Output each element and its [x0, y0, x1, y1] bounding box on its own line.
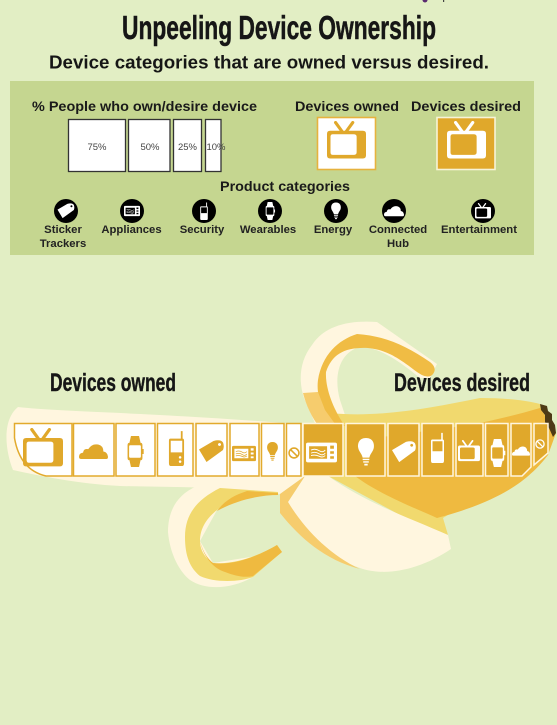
category: sticker trackers: Trackers: [40, 238, 86, 250]
size legend boxes: 10%: [206, 142, 226, 153]
peel: lower left cream: [168, 484, 282, 587]
tile: wearables owned: [116, 424, 155, 476]
strip: devices desired: [303, 424, 548, 476]
tile: security desired: [422, 424, 453, 476]
category: energy: Energy: [314, 224, 353, 236]
tile: energy owned: [262, 424, 284, 476]
tile: wearables desired: [486, 424, 508, 476]
heading: devices owned: Devices owned: [295, 98, 399, 114]
cream flesh bottom: [288, 476, 451, 572]
tile: none owned: [286, 424, 301, 476]
category: sticker trackers: Sticker: [44, 224, 82, 236]
banana body: orange side: [355, 408, 556, 518]
tile: entertainment owned: [14, 424, 72, 476]
cropped marks at top edge: [422, 0, 444, 2]
category: connected hub: Hub: [387, 238, 409, 250]
category: connected hub: Connected: [369, 224, 427, 236]
category: entertainment: Entertainment: [441, 224, 517, 236]
tile: hub desired: [511, 424, 531, 476]
heading: devices desired: Devices desired: [411, 98, 521, 114]
heading: product categories: Product categories: [220, 178, 350, 194]
category: entertainment: [441, 199, 517, 236]
subtitle: Device categories that are owned versus desired.: [49, 52, 489, 72]
tile: security owned: [158, 424, 193, 476]
tile: entertainment desired: [456, 424, 483, 476]
banana body: yellow flesh: [328, 398, 552, 535]
peel: lower left orange lower: [200, 541, 282, 577]
category: energy: [314, 199, 353, 236]
tile: appliances owned: [230, 424, 259, 476]
category: sticker trackers: [40, 199, 86, 250]
panel: legend: [10, 81, 534, 255]
size legend boxes: 25%: [178, 142, 198, 153]
peel: upper orange band: [318, 334, 435, 426]
banana tip: [540, 404, 556, 437]
strip: devices owned: [14, 424, 301, 476]
size legend boxes: 75%: [87, 142, 107, 153]
peel: sliver at fold: [303, 392, 338, 428]
category: connected hub: [369, 199, 427, 250]
tile: sticker trackers owned: [196, 424, 227, 476]
peel: upper cream: [301, 322, 437, 430]
size legend boxes: [68, 120, 226, 172]
icon: owned legend tile: [318, 118, 376, 170]
tile: hub owned: [74, 424, 114, 476]
category: appliances: Appliances: [101, 224, 162, 236]
category: appliances: [101, 199, 162, 236]
peel: lower left yellow: [185, 488, 282, 581]
peel: left cream strip: [6, 407, 330, 494]
peel sliver: light orange: [280, 476, 360, 569]
banana illustration: [6, 322, 556, 587]
category: wearables: Wearables: [240, 224, 296, 236]
category: wearables: [240, 199, 296, 236]
category: security: [180, 199, 225, 236]
tile: energy desired: [346, 424, 385, 476]
size legend boxes: 50%: [140, 142, 160, 153]
icon: desired legend tile: [437, 118, 495, 170]
peel: lower left orange upper: [217, 491, 278, 511]
tile: none desired: [534, 424, 548, 465]
category: security: Security: [180, 224, 225, 236]
heading: percent people: % People who own/desire device: [32, 98, 257, 114]
tile: sticker trackers desired: [388, 424, 419, 476]
tile: appliances desired: [303, 424, 343, 476]
heading: devices owned over banana: Devices owned: [50, 369, 176, 397]
